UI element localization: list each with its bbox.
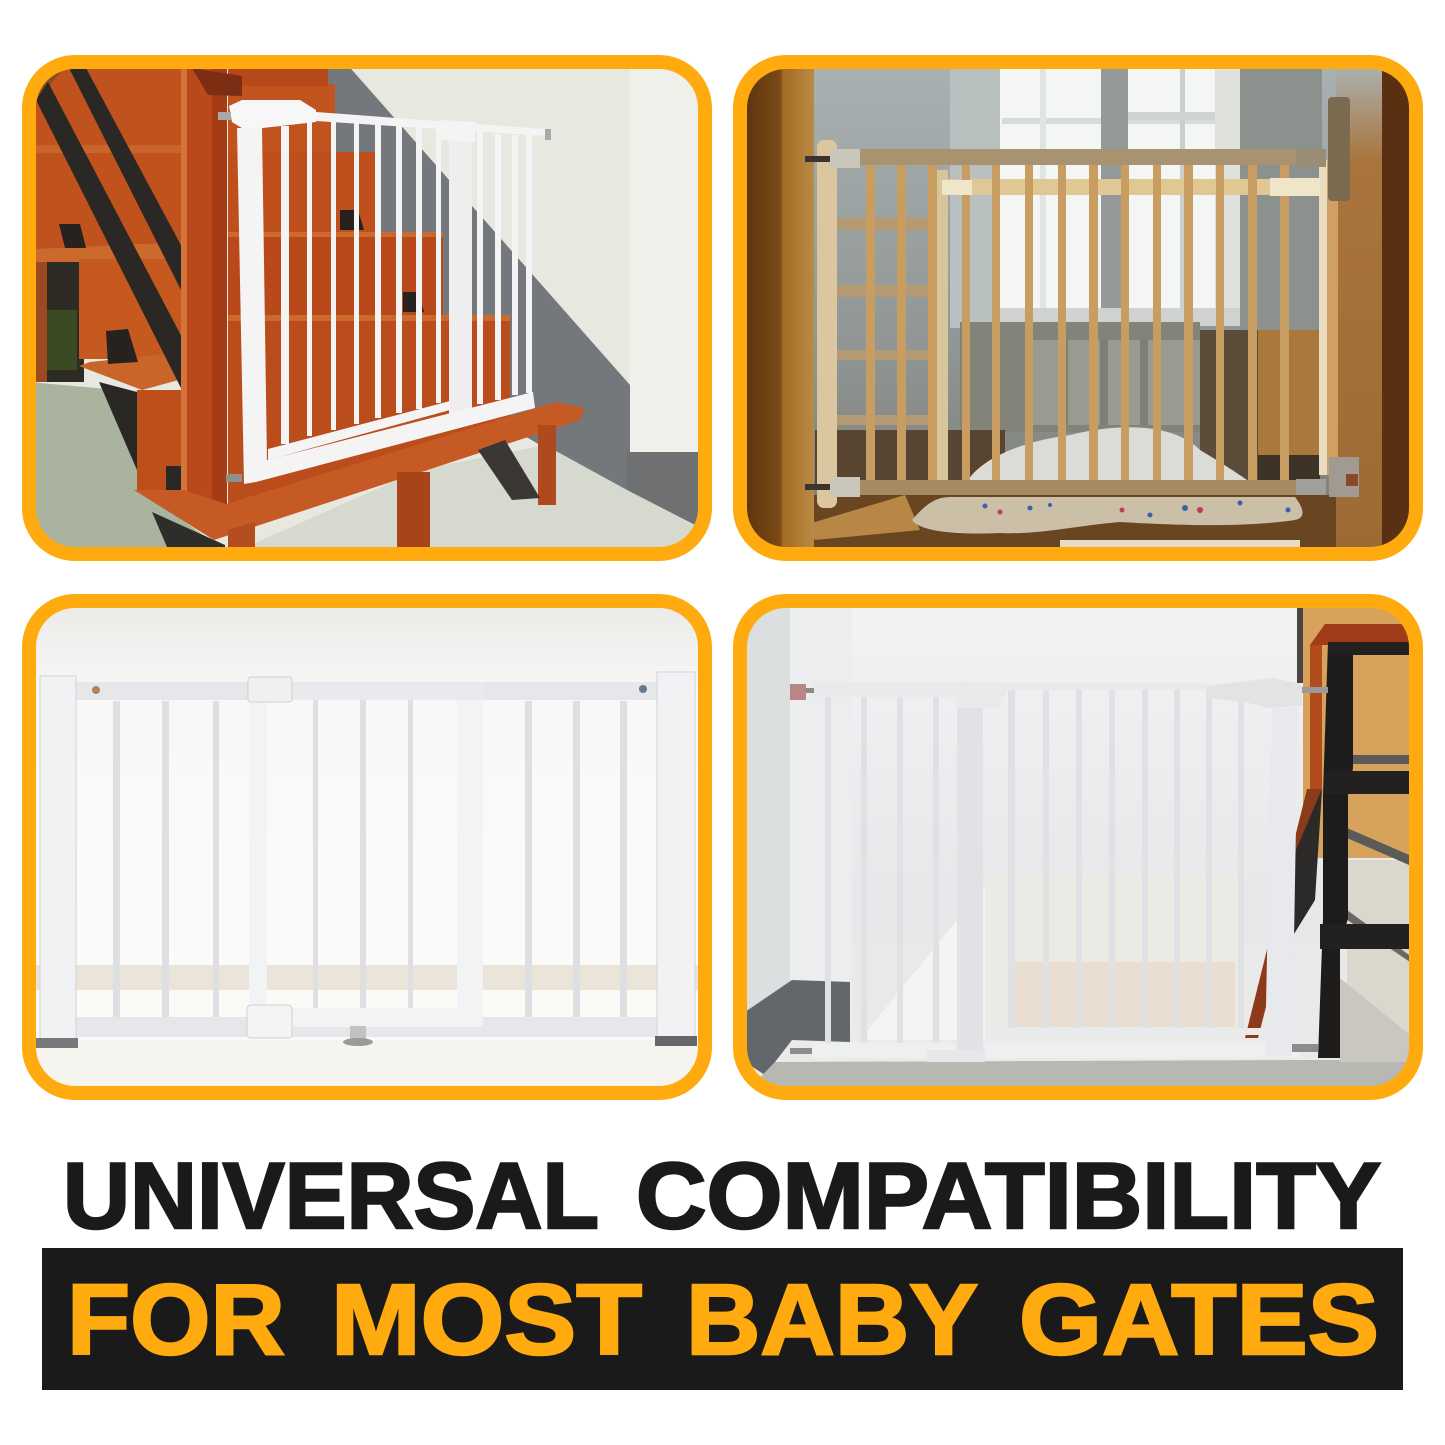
- heading: universal compatibility: UNIVERSAL: [63, 1143, 599, 1248]
- window: [950, 68, 1322, 338]
- banner: for most baby gates: MOST: [331, 1264, 642, 1376]
- banner: for most baby gates: GATES: [1019, 1264, 1379, 1376]
- panel: white gate at top of stairs: [740, 601, 1417, 1093]
- gate frame: [40, 672, 695, 1042]
- wooden stairs: [36, 62, 510, 554]
- panel: white gate front view: [29, 601, 705, 1093]
- floor: [814, 495, 1336, 547]
- white gate: [812, 678, 1302, 1062]
- panel: wooden gate in doorway: [740, 62, 1416, 555]
- blanket dots: [982, 500, 1290, 518]
- banner: for most baby gates: FOR: [67, 1264, 285, 1376]
- newel post: [187, 69, 212, 500]
- wainscot and stairs: [1200, 330, 1260, 480]
- bench: [134, 402, 585, 540]
- heading: universal compatibility: COMPATIBILITY: [636, 1143, 1381, 1248]
- white gate: [229, 100, 545, 484]
- black handrail: [69, 68, 183, 294]
- wooden gate: [805, 97, 1359, 508]
- wood and black railing: [1245, 608, 1417, 1062]
- banner: for most baby gates: BABY: [686, 1264, 978, 1376]
- panel: white gate on wooden stairs: [29, 62, 705, 554]
- shelves: [836, 218, 931, 425]
- banner: for most baby gates: [42, 1248, 1403, 1390]
- radiator: [960, 322, 1200, 432]
- blanket: [968, 427, 1250, 482]
- heading: universal compatibility: [63, 1143, 1381, 1248]
- door frames: [746, 62, 814, 554]
